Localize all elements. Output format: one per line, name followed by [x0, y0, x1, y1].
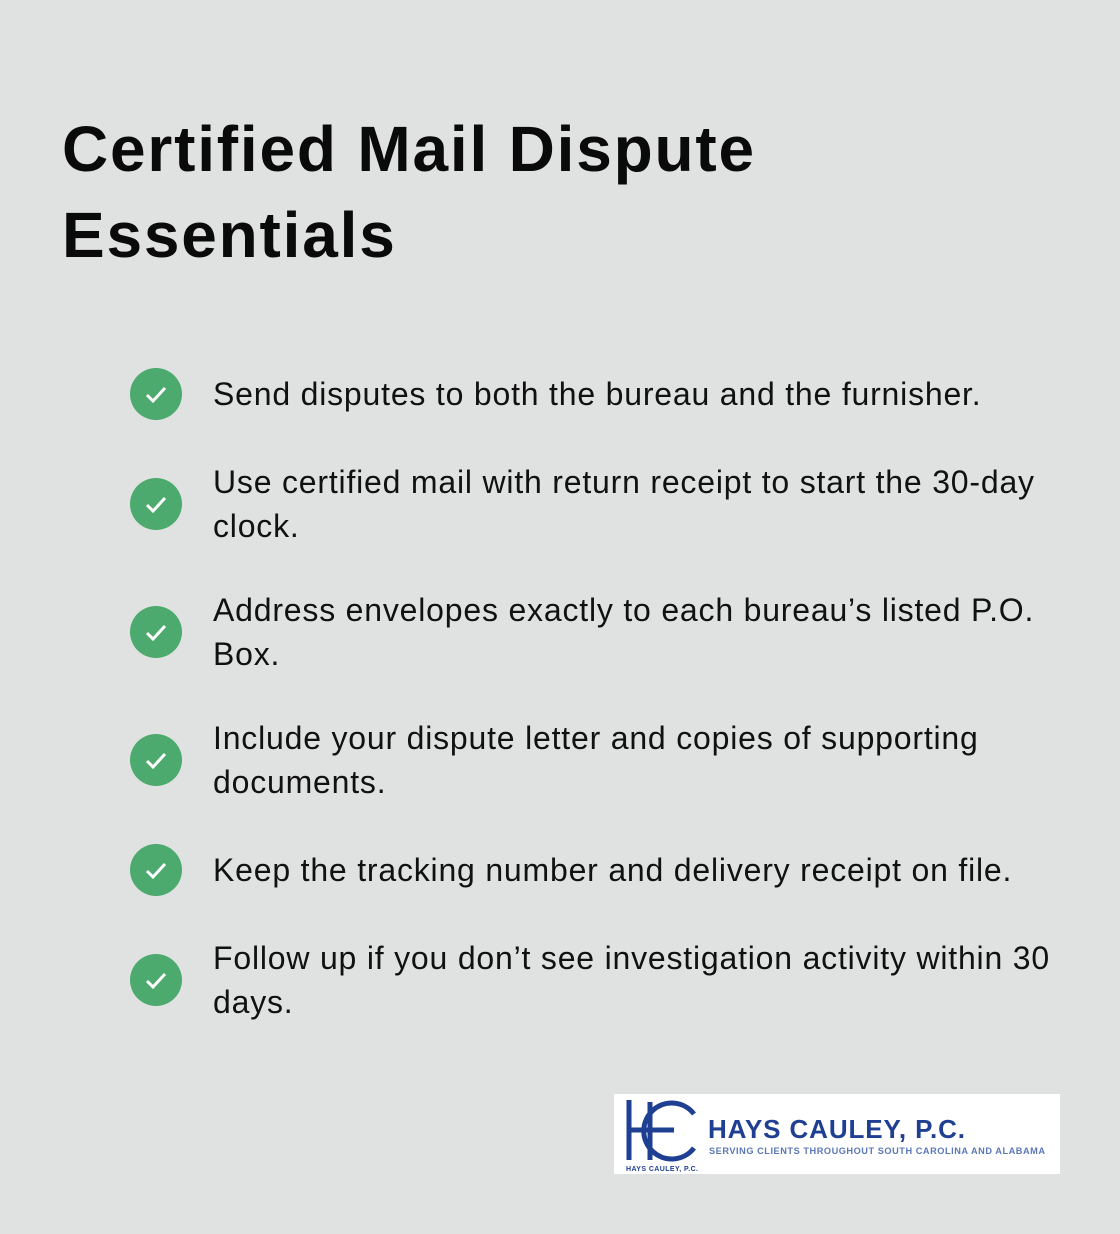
- text 4: Include your dispute letter and copies of supporting documents.: [213, 720, 979, 800]
- item 2: [130, 464, 1035, 544]
- text 1: Send disputes to both the bureau and the furnisher.: [213, 376, 981, 412]
- text 2: Use certified mail with return receipt to start the 30-day clock.: [213, 464, 1035, 544]
- item 5: [130, 844, 1012, 896]
- text 6: Follow up if you don’t see investigation activity within 30 days.: [213, 940, 1050, 1020]
- title: Essentials: [62, 199, 397, 271]
- logo: SERVING CLIENTS THROUGHOUT SOUTH CAROLINA AND ALABAMA: [709, 1146, 1045, 1156]
- logo: HAYS CAULEY, P.C.: [708, 1114, 965, 1144]
- text 3: Address envelopes exactly to each bureau’s listed P.O. Box.: [213, 592, 1034, 672]
- logo: HAYS CAULEY, P.C.: [626, 1166, 698, 1173]
- item 6: [130, 940, 1050, 1020]
- title: [62, 113, 756, 271]
- item 3: [130, 592, 1034, 672]
- icon: check: [130, 734, 182, 786]
- logo mark: [629, 1100, 694, 1160]
- icon: check: [130, 606, 182, 658]
- icon: check: [130, 844, 182, 896]
- icon: check: [130, 954, 182, 1006]
- title: Certified Mail Dispute: [62, 113, 756, 185]
- icon: check: [130, 368, 182, 420]
- text 5: Keep the tracking number and delivery receipt on file.: [213, 852, 1012, 888]
- item 1: [130, 368, 981, 420]
- logo: [614, 1094, 1060, 1174]
- item 4: [130, 720, 979, 800]
- icon: check: [130, 478, 182, 530]
